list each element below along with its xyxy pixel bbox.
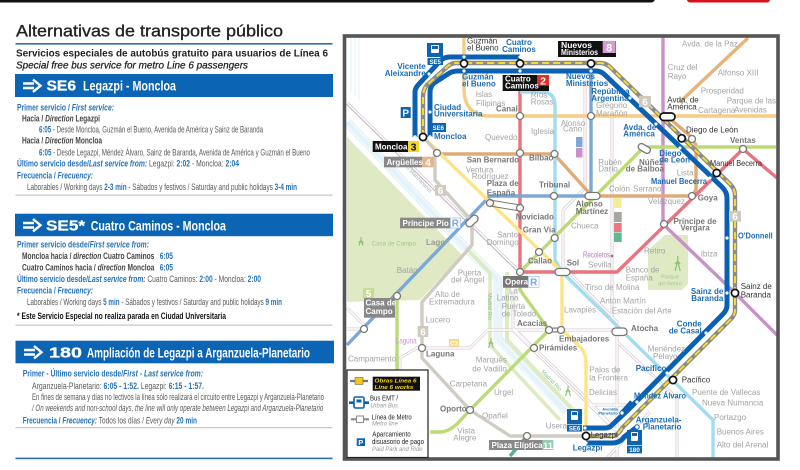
line 9 orange north <box>680 38 748 102</box>
SE6 first service: Primer servicio / First service: <box>17 103 114 114</box>
commuter station labels: Laguna <box>396 335 417 345</box>
panel: bus services <box>15 22 334 459</box>
station labels: line 6 and bus: Pacífico <box>682 375 711 384</box>
station labels: line 6 and bus: Méndez Álvaro <box>634 391 686 400</box>
icon: bus SE5 <box>427 43 443 66</box>
station tag: Nuevos Ministerios 8: Ministerios <box>561 48 598 57</box>
station tag: Moncloa 3: 3 <box>411 142 417 154</box>
station labels: closed metro stations: Estación del Arte <box>612 306 672 315</box>
station labels: closed metro stations: de Balboa <box>626 165 664 174</box>
line 1 light blue <box>520 92 713 458</box>
station labels: closed metro stations: la Frontera <box>589 374 629 383</box>
station labels: closed metro stations: Puerta <box>458 269 482 278</box>
bus route SE6 <box>430 71 727 428</box>
station labels: closed metro stations: Antón Martín <box>600 296 646 305</box>
station labels: closed metro stations: Buenos Aires <box>717 427 764 436</box>
commuter station labels: Recoletos <box>583 249 610 259</box>
station labels: line 6 and bus: el Bueno <box>462 80 496 89</box>
station tag: Opera R: R <box>530 278 538 288</box>
station labels: closed metro stations: España <box>487 189 516 198</box>
station labels: line 6 and bus: Vicente <box>397 62 426 71</box>
legend: park and ride: Aparcamiento <box>372 431 411 438</box>
park and river labels: del Retiro <box>658 282 682 288</box>
station tag: Nuevos Ministerios 8: Nuevos <box>561 41 593 50</box>
station labels: line 6 and bus: Planetario <box>598 410 618 415</box>
station labels: closed metro stations: Alto del Arenal <box>717 441 769 450</box>
station labels: closed metro stations: Cartagena <box>698 106 736 115</box>
station labels: closed metro stations: Gran Vía <box>523 226 556 235</box>
180 banner <box>16 341 334 363</box>
SE5 banner: Cuatro Caminos - Moncloa <box>91 218 226 234</box>
station tag: Cuatro Caminos 2 <box>503 75 549 91</box>
station labels: closed metro stations: Menéndez <box>648 345 685 354</box>
station labels: closed metro stations: San Bernardo <box>467 156 519 165</box>
station labels: line 6 and bus: Cuatro <box>506 38 532 47</box>
station labels: closed metro stations: Ventura <box>466 165 494 174</box>
station labels: closed metro stations: Colón <box>609 185 630 194</box>
map frame <box>344 36 778 459</box>
station labels: closed metro stations: Rayo <box>668 72 687 81</box>
SE6 banner: SE6 <box>46 78 76 95</box>
station labels: closed metro stations: Lucero <box>426 315 451 324</box>
station labels: closed metro stations: Marqués <box>476 356 507 365</box>
station tag: Príncipe Pío R: R <box>452 219 460 230</box>
station tag: Opera R <box>503 276 539 288</box>
park: Casa de Campo <box>347 137 462 302</box>
station tag: Cuatro Caminos 2: 2 <box>540 76 546 88</box>
legend: park and ride: Paid Park and Ride <box>372 446 423 453</box>
station labels: line 6 and bus: Diego de León <box>686 126 738 135</box>
legend: metro line <box>351 414 412 428</box>
icon: pedestrian Casa de Campo <box>358 237 364 246</box>
station labels: closed metro stations: Parque de las <box>727 96 776 105</box>
bus route SE5 <box>415 57 520 137</box>
station labels: closed metro stations: Goya <box>698 194 718 203</box>
station tag: Argüelles 4: Argüelles <box>386 158 424 167</box>
station tag: Moncloa 3 <box>373 141 419 154</box>
metro line number badges: 6 <box>420 328 426 338</box>
station labels: closed metro stations: Bilbao <box>529 154 554 163</box>
station labels: line 6 and bus: Baranda <box>691 294 724 303</box>
icon: pedestrian Madrid Río <box>488 338 494 348</box>
commuter station labels <box>396 249 613 345</box>
180 banner: Ampliación de Legazpi a Arganzuela-Planetario <box>87 346 310 361</box>
station labels: closed metro stations: Alfonso XIII <box>718 69 759 78</box>
stations: closed metro stops <box>360 112 746 440</box>
legend: line 6 works: Obras Línea 6 <box>374 378 418 384</box>
line 11 green <box>510 436 527 456</box>
panel: 180: Arganzuela-Planetario: 6:05 - 1:52. Legazpi: 6:15 - 1:57. <box>32 381 204 392</box>
station tag: Plaza Elíptica 11: 11 <box>543 441 554 452</box>
station labels: line 6 and bus: Moncloa <box>434 132 467 141</box>
park: Retiro <box>648 235 688 290</box>
SE6 direction Legazpi: Hacia / Direction Legazpi <box>22 114 100 124</box>
station labels: closed metro stations: Vergara <box>680 224 710 233</box>
station labels: closed metro stations: Islas <box>476 90 492 99</box>
station labels: closed metro stations: Alonso <box>576 200 603 209</box>
station labels: closed metro stations: Sol <box>567 259 579 268</box>
icon: arrow <box>23 80 40 92</box>
station labels: closed metro stations: Noviciado <box>516 212 554 221</box>
station labels: closed metro stations: Extremadura <box>429 297 475 306</box>
station labels: line 6 and bus: Nuevos <box>566 72 595 81</box>
station labels: line 6 and bus: Sainz de <box>741 282 772 291</box>
legend: urban bus: Bus EMT / <box>370 396 398 403</box>
station labels: closed metro stations: de Toledo <box>502 310 537 319</box>
line 4 tan <box>437 116 696 196</box>
station labels: closed metro stations: del Ángel <box>451 275 485 284</box>
SE5 banner <box>15 214 333 236</box>
station labels: closed metro stations: Sevilla <box>588 260 612 269</box>
station labels: closed metro stations: Quevedo <box>485 133 518 142</box>
icon: SE6 label: SE6 <box>433 126 445 132</box>
station labels: line 6 and bus: el Bueno <box>467 44 499 52</box>
station labels: closed metro stations: Velázquez <box>648 197 685 206</box>
park and river labels: Madrid Río <box>486 293 492 320</box>
panel: SE5 <box>15 214 333 326</box>
station tag: Moncloa 3: Moncloa <box>375 142 408 152</box>
metro line number badges: 6 <box>732 212 738 223</box>
station labels: line 6 and bus: Legazpi <box>591 431 618 440</box>
station labels: closed metro stations: Avenidas <box>734 105 767 114</box>
station labels: closed metro stations <box>348 40 776 450</box>
line 3 yellow <box>423 137 586 436</box>
station tag: Opera R: Opera <box>505 278 529 287</box>
station labels: line 6 and bus <box>385 36 773 453</box>
icon: bus SE5: SE5 <box>430 60 442 66</box>
metro line number badges: C3 <box>450 342 458 348</box>
station labels: closed metro stations: Vista <box>457 426 475 435</box>
station labels: line 6 and bus: Argentina <box>591 94 629 103</box>
station labels: closed metro stations: Iglesia <box>531 127 555 136</box>
station labels: closed metro stations: Laguna <box>426 350 455 359</box>
station labels: closed metro stations: Príncipe de <box>673 217 717 226</box>
SE5 last service: Último servicio desde/Last service from: Cuatro Caminos: 2:00 - Moncloa: 2:00 <box>17 273 261 285</box>
SE6 direction Moncloa: Hacia / Direction Moncloa <box>22 136 102 146</box>
SE6 last service: Último servicio desde/Last service from: Legazpi: 2:02 - Moncloa: 2:04 <box>17 158 240 170</box>
station labels: line 6 and bus: Baranda <box>741 291 771 300</box>
station labels: closed metro stations: La <box>509 286 518 295</box>
park and river labels: Río Manzanares <box>401 161 433 195</box>
station labels: closed metro stations: Rosas <box>531 98 553 107</box>
station labels: closed metro stations: Chueca <box>571 221 599 230</box>
station labels: line 6 and bus: Arganzuela- <box>636 415 682 424</box>
icon: bus 180: 180 <box>629 447 640 454</box>
station tag: Príncipe Pío R: Príncipe Pío <box>402 219 449 228</box>
station labels: closed metro stations: Santo <box>497 230 518 239</box>
line 5 green <box>397 147 776 432</box>
commuter badges <box>576 137 622 242</box>
panel: SE6: Laborables / Working days 2-3 min - Sábados y festivos / Saturday and public holidays 3-4 min <box>27 182 297 193</box>
subtitle: Servicios especiales de autobús gratuito para usuarios de Línea 6 <box>16 48 328 60</box>
station labels: closed metro stations: Oporto <box>440 405 467 414</box>
station labels: closed metro stations: Latina <box>497 294 519 303</box>
line 6 in works: grey with yellow dashes <box>423 63 735 436</box>
station labels: line 6 and bus: Ciudad <box>434 103 461 112</box>
station tag: Nuevos Ministerios 8 <box>558 41 616 57</box>
station tag: Casa de Campo <box>364 298 397 318</box>
station labels: closed metro stations: España <box>626 273 653 282</box>
station labels: line 6 and bus: Aleixandre <box>385 69 426 78</box>
SE5 banner: SE5* <box>46 218 85 235</box>
legend <box>347 370 428 458</box>
station labels: closed metro stations: Alonso <box>561 119 586 128</box>
top black bar <box>0 0 655 2</box>
panel: SE5: Moncloa hacia / direction Cuatro Caminos 6:05 <box>22 251 173 262</box>
legend: park and ride: P <box>358 438 363 447</box>
station labels: closed metro stations: Batán <box>397 266 418 275</box>
station labels: line 6 and bus: Caminos <box>502 45 536 54</box>
station labels: closed metro stations: Tirso de Molina <box>585 283 640 292</box>
stations: line 6 interchange stops <box>419 60 739 440</box>
Madrid Río bands <box>347 38 575 420</box>
station labels: closed metro stations: Canal <box>496 105 518 114</box>
station labels: closed metro stations: Tribunal <box>539 181 570 190</box>
station labels: closed metro stations: Atocha <box>631 324 659 333</box>
180 banner: 180 <box>49 345 82 362</box>
station labels: closed metro stations: Ibiza <box>701 250 718 259</box>
metro line number badges: 5 <box>366 289 372 300</box>
panel: SE6: 6:05 - Desde Legazpi, Méndez Álvaro, Sainz de Baranda, Avenida de América y Guzmán el Bueno <box>39 148 310 158</box>
icon: SE6 label <box>431 123 446 132</box>
station labels: closed metro stations: Lista <box>677 169 694 178</box>
icon: parking <box>401 107 411 120</box>
station labels: line 6 and bus: Legazpi <box>573 444 602 453</box>
station labels: closed metro stations: Usera <box>546 421 568 430</box>
station labels: closed metro stations: Rubén <box>598 158 622 167</box>
station labels: closed metro stations: Opañel <box>482 412 508 421</box>
station labels: closed metro stations: de Vadillo <box>472 365 507 374</box>
station labels: line 6 and bus: Avenida <box>602 406 618 411</box>
SE6 banner: Legazpi - Moncloa <box>83 78 176 94</box>
legend: line 6 works: Line 6 works <box>374 385 414 391</box>
top red bar <box>687 0 770 2</box>
station labels: line 6 and bus: América <box>667 102 697 111</box>
title: Alternativas de transporte público <box>16 22 283 41</box>
station labels: closed metro stations: Ríos <box>531 90 547 99</box>
station labels: closed metro stations: Banco de <box>626 266 660 275</box>
station labels: line 6 and bus: Ministerios <box>566 79 609 88</box>
subtitle in English: Special free bus service for metro Line 6 passengers <box>16 60 248 72</box>
SE5 first service: Primer servicio desde/First service from: <box>17 239 149 250</box>
panel: SE6: 6:05 - Desde Moncloa, Guzmán el Bueno, Avenida de América y Sainz de Baranda <box>39 125 263 136</box>
station labels: closed metro stations: Marañón <box>596 109 628 118</box>
panel: SE5: Laborables / Working days 5 min - Sábados y festivos / Saturday and public holidays 9 min <box>27 297 282 308</box>
legend: park and ride: disuasorio de pago <box>372 439 424 446</box>
station labels: closed metro stations: Darío <box>598 165 618 174</box>
bus stops <box>413 55 729 445</box>
station labels: line 6 and bus: República <box>591 87 630 96</box>
commuter rail lines <box>346 80 677 458</box>
legend: metro line: Línea de Metro <box>372 414 412 421</box>
station labels: line 6 and bus: Planetario <box>643 422 681 431</box>
station labels: closed metro stations: Gregorio <box>596 101 628 110</box>
station labels: closed metro stations: Palos de <box>589 366 621 375</box>
station labels: line 6 and bus: América <box>623 130 655 139</box>
station labels: closed metro stations: Puerta <box>502 302 526 311</box>
station labels: closed metro stations: Alegre <box>453 433 477 442</box>
station labels: line 6 and bus: Manuel Becerra <box>710 159 762 168</box>
station labels: closed metro stations: Nueva Numancia <box>702 399 764 408</box>
icon: pedestrian Retiro <box>675 256 680 271</box>
station labels: line 6 and bus: Manuel Becerra <box>651 177 708 186</box>
station labels: line 6 and bus: Avda. de <box>623 123 657 132</box>
station tag: Argüelles 4: 4 <box>425 157 431 169</box>
station labels: closed metro stations: Serrano <box>633 185 662 194</box>
line 7 orange <box>464 36 777 116</box>
panel: SE5: Cuatro Caminos hacia / direction Moncloa 6:05 <box>22 263 173 274</box>
icon: bus SE6 south: SE6 <box>569 427 581 433</box>
park and river labels: Casa de Campo <box>372 241 417 247</box>
station labels: closed metro stations: Lavapiés <box>564 305 596 314</box>
station labels: closed metro stations: Cano <box>563 125 583 134</box>
station labels: closed metro stations: Campamento <box>348 355 397 364</box>
metro line number badges: 6 <box>642 98 648 108</box>
station labels: closed metro stations: Martínez <box>576 207 608 216</box>
station tag: Argüelles 4 <box>384 157 434 169</box>
icon: arrow <box>23 219 40 231</box>
icon: pedestrian Madrid Río south <box>566 386 570 396</box>
SE6 banner <box>15 74 333 97</box>
park and river labels: Madrid Río <box>540 369 563 393</box>
SE5 frequency: Frecuencia / Frecuency: <box>17 286 93 297</box>
station labels: closed metro stations: Núñez <box>639 158 663 167</box>
180 first and last service: Primer - Último servicio desde/First - Last service from: <box>23 368 203 380</box>
station tag: Plaza Elíptica 11 <box>489 440 554 452</box>
station labels: line 6 and bus: Avda. de <box>667 96 699 105</box>
station labels: line 6 and bus: de Casal <box>669 327 702 336</box>
station tag: Cuatro Caminos 2: Caminos <box>505 82 539 91</box>
line 2 red <box>520 88 777 272</box>
legend: metro line: Metro line <box>372 421 398 428</box>
station labels: closed metro stations: Carpetana <box>450 379 488 388</box>
station labels: closed metro stations: Plaza de <box>487 179 519 188</box>
station labels: line 6 and bus: Conde <box>677 320 702 329</box>
180 frequency: Frecuencia / Frecuency: Todos los días / Every day 20 min <box>23 415 197 426</box>
station labels: closed metro stations: Retiro <box>644 247 666 256</box>
legend: urban bus: Urban Bus <box>370 403 399 410</box>
station labels: closed metro stations: Embajadores <box>559 335 610 344</box>
metro line number badges <box>363 96 741 348</box>
icon: bus 180 <box>627 430 642 454</box>
park and river labels: Parque <box>661 274 679 280</box>
station labels: line 6 and bus: Guzmán <box>462 72 494 81</box>
panel: SE6 <box>15 74 333 196</box>
legend: park and ride <box>357 431 424 453</box>
station labels: line 6 and bus: Pacífico <box>636 364 666 373</box>
bus route 180 <box>586 402 637 443</box>
panel: 180 <box>16 341 334 428</box>
station tag: Plaza Elíptica 11: Plaza Elíptica <box>492 441 543 450</box>
line 10 blue <box>347 63 591 345</box>
park and river labels <box>358 161 682 396</box>
icon: bus SE6 south <box>567 409 582 433</box>
station labels: closed metro stations: Avda. de la Paz <box>682 40 738 49</box>
station tag: Cuatro Caminos 2: Cuatro <box>505 75 531 84</box>
metro line number badges: 6 <box>438 186 444 197</box>
legend: urban bus <box>349 396 399 410</box>
station tag: Casa de Campo: Campo <box>366 307 393 316</box>
station labels: closed metro stations: Domingo <box>487 238 519 247</box>
station labels: line 6 and bus: de León <box>659 156 690 165</box>
line 9 purple <box>663 36 777 335</box>
station labels: line 6 and bus: O'Donnell <box>738 232 773 241</box>
icon: arrow <box>24 346 42 358</box>
SE6 frequency: Frecuencia / Frecuency: <box>17 170 93 182</box>
legend: line 6 works <box>350 377 420 391</box>
panel: metro map <box>344 36 778 459</box>
station tag: Príncipe Pío R <box>400 218 460 230</box>
station labels: closed metro stations: Filipinas <box>476 99 505 108</box>
station tag: Nuevos Ministerios 8: 8 <box>606 42 612 54</box>
station labels: closed metro stations: Acacias <box>517 319 548 328</box>
station labels: line 6 and bus: Guzmán <box>467 36 497 46</box>
icon: parking: P <box>402 108 409 120</box>
station labels: closed metro stations: Puente de Vallecas <box>692 388 760 397</box>
station labels: line 6 and bus: Sainz de <box>691 287 724 296</box>
station labels: closed metro stations: Prosperidad <box>701 86 744 95</box>
station labels: closed metro stations: Callao <box>528 257 552 266</box>
station labels: closed metro stations: Alto de <box>435 290 460 299</box>
station labels: closed metro stations: Cruz del <box>668 63 698 72</box>
station tag: Casa de Campo: Casa de <box>366 299 397 308</box>
180 weekend note: En fines de semana y días no lectivos la línea sólo realizará el circuito entre Legazpi y Arganzuela-Planetario <box>32 392 324 403</box>
SE5 footnote: * Este Servicio Especial no realiza parada en Ciudad Universitaria <box>17 311 226 322</box>
station labels: line 6 and bus: Universitaria <box>434 110 483 119</box>
station labels: closed metro stations: Pelayo <box>653 352 678 361</box>
station labels: closed metro stations: Delicias <box>589 388 617 397</box>
station labels: closed metro stations: Urgel <box>494 388 513 397</box>
station labels: closed metro stations: Ventas <box>730 136 756 145</box>
panel: 180: / On weekends and non-school days, the line will only operate between Legazpi and Arganzuela-Planetario <box>31 403 323 414</box>
station labels: closed metro stations: Lago <box>426 238 445 247</box>
station labels: line 6 and bus: Diego <box>659 149 682 158</box>
station labels: closed metro stations: Portazgo <box>714 413 747 422</box>
station labels: closed metro stations: Rodríguez <box>472 172 509 181</box>
station labels: closed metro stations: Pirámides <box>539 343 578 352</box>
line 6 closed section light grey <box>422 137 586 436</box>
